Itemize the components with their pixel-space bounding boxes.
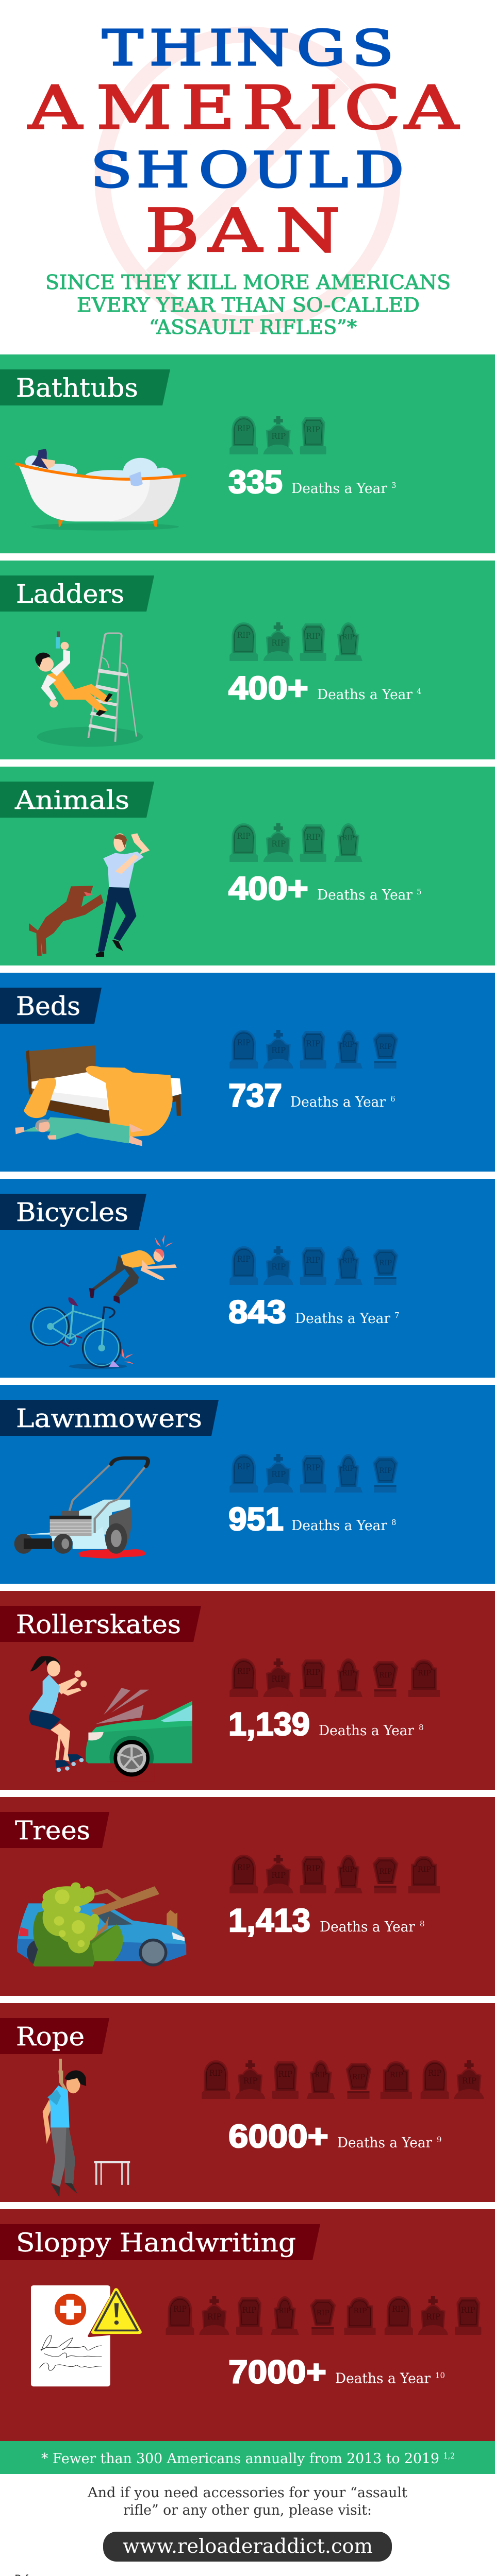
heading: animals: Animals	[14, 785, 129, 815]
heading: bicycles: Bicycles	[16, 1197, 128, 1227]
icon row: 6 gravestones	[229, 1658, 440, 1697]
stat: 1,139 deaths: Deaths a Year	[319, 1723, 414, 1739]
stat: 737 deaths: 6	[390, 1094, 395, 1104]
stat: 7000+ deaths	[228, 2354, 445, 2391]
icon row: 8 gravestones: RIP	[428, 2068, 441, 2078]
title line: BAN: BAN	[145, 196, 340, 265]
stat: 335 deaths: 3	[391, 481, 397, 490]
illustration: tree fallen on car	[17, 1883, 186, 1967]
stat: 1,139 deaths: 8	[419, 1723, 424, 1732]
icon row: 6 gravestones: RIP	[306, 1863, 320, 1873]
icon row: 5 gravestones	[229, 1454, 399, 1493]
icon row: 8 gravestones	[202, 2060, 484, 2099]
subtitle: SINCE THEY KILL MORE AMERICANS	[45, 271, 451, 294]
icon row: 6 gravestones: RIP	[306, 1667, 320, 1677]
stat: 6000+ deaths: 9	[437, 2135, 442, 2144]
illustration: prescription with warning sign	[31, 2285, 142, 2386]
subtitle: EVERY YEAR THAN SO-CALLED	[77, 294, 420, 316]
icon row: 9 gravestones	[166, 2296, 481, 2335]
icon row: 8 gravestones: RIP	[278, 2069, 293, 2079]
stat: 400+ deaths	[228, 871, 422, 907]
icon row: 9 gravestones: RIP	[207, 2312, 222, 2321]
icon row: 5 gravestones: RIP	[306, 1255, 320, 1265]
icon row: 9 gravestones: RIP	[279, 2307, 291, 2315]
illustration: man falling from ladder	[35, 632, 143, 747]
stat: 400+ deaths	[228, 670, 422, 706]
heading: lawnmowers: Lawnmowers	[16, 1403, 202, 1433]
icon row: 5 gravestones: RIP	[342, 1041, 354, 1049]
heading: rollerskates	[0, 1606, 201, 1642]
call to action text: And if you need accessories for your “assault	[87, 2485, 407, 2501]
icon row: 6 gravestones: RIP	[379, 1868, 392, 1876]
icon row: 4 gravestones: RIP	[237, 630, 251, 640]
heading: lawnmowers	[0, 1400, 219, 1436]
icon row: 9 gravestones: RIP	[392, 2304, 406, 2314]
icon row: 6 gravestones: RIP	[237, 1862, 251, 1872]
icon row: 8 gravestones: RIP	[315, 2071, 327, 2079]
icon row: 5 gravestones: RIP	[237, 1038, 251, 1047]
heading: animals	[0, 782, 154, 818]
icon row: 5 gravestones: RIP	[342, 1465, 354, 1473]
illustration: person in bathtub	[16, 449, 185, 531]
illustration: dog attacking man	[29, 833, 150, 957]
icon row: 5 gravestones: RIP	[306, 1463, 320, 1472]
ban symbol watermark	[103, 35, 392, 324]
stat: 843 deaths: 7	[394, 1311, 400, 1320]
stat: 7000+ deaths: 7000+	[228, 2354, 326, 2391]
stat: 6000+ deaths	[228, 2119, 442, 2155]
icon row: 8 gravestones: RIP	[243, 2076, 258, 2086]
title line: AMERICA: AMERICA	[28, 73, 459, 142]
icon row: 4 gravestones	[229, 622, 362, 661]
illustration: person fallen from bed	[15, 1045, 182, 1146]
stat: 335 deaths: 335	[228, 464, 283, 500]
panel: trees	[0, 1797, 495, 1996]
stat: 843 deaths: Deaths a Year	[295, 1311, 390, 1327]
icon row: 9 gravestones: RIP	[173, 2304, 187, 2314]
stat: 400+ deaths: 4	[417, 687, 422, 696]
stat: 400+ deaths: 400+	[228, 670, 308, 706]
panel: bathtubs	[0, 354, 495, 553]
illustration: cyclist thrown from bike	[31, 1235, 177, 1369]
stat: 400+ deaths: 400+	[228, 871, 308, 907]
stat: 1,413 deaths: 1,413	[228, 1903, 310, 1939]
stat: 1,413 deaths: Deaths a Year	[320, 1919, 415, 1935]
call to action text: rifle” or any other gun, please visit:	[123, 2502, 372, 2518]
website pill	[103, 2532, 392, 2562]
subtitle: “ASSAULT RIFLES”*	[149, 316, 357, 338]
stat: 1,413 deaths: 8	[420, 1919, 425, 1928]
icon row: 3 gravestones	[229, 416, 326, 454]
stat: 951 deaths	[228, 1501, 397, 1537]
stat: 951 deaths: 8	[391, 1518, 397, 1527]
icon row: 5 gravestones: RIP	[271, 1469, 286, 1479]
website pill: www.reloaderaddict.com	[123, 2535, 373, 2557]
panel: beds	[0, 973, 495, 1172]
stat: 400+ deaths: 5	[417, 887, 422, 896]
icon row: 6 gravestones	[229, 1855, 440, 1893]
icon row: 5 gravestones: RIP	[379, 1043, 392, 1051]
icon row: 6 gravestones: RIP	[237, 1666, 251, 1676]
icon row: 8 gravestones: RIP	[462, 2076, 476, 2086]
icon row: 4 gravestones: RIP	[306, 631, 320, 641]
illustration: skater hit by car	[29, 1656, 192, 1781]
icon row: 6 gravestones: RIP	[342, 1669, 354, 1677]
footnote banner: * Fewer than 300 Americans annually from 2013 to 2019	[41, 2451, 439, 2467]
panel: rollerskates	[0, 1591, 495, 1790]
icon row: 8 gravestones: RIP	[352, 2073, 365, 2081]
icon row: 5 gravestones: RIP	[342, 1257, 354, 1265]
icon row: 4 gravestones: RIP	[271, 638, 286, 648]
icon row: 9 gravestones: RIP	[317, 2309, 329, 2317]
icon row: 3 gravestones: RIP	[306, 425, 320, 434]
icon row: 5 gravestones	[229, 1246, 399, 1285]
icon row: 4 gravestones: RIP	[271, 839, 286, 849]
illustration: rope figure and table	[43, 2059, 130, 2197]
icon row: 5 gravestones: RIP	[271, 1262, 286, 1272]
icon row: 8 gravestones: RIP	[390, 2071, 403, 2079]
icon row: 9 gravestones: RIP	[242, 2305, 257, 2315]
icon row: 6 gravestones: RIP	[418, 1669, 431, 1677]
stat: 951 deaths: Deaths a Year	[291, 1518, 387, 1534]
heading: trees	[0, 1812, 109, 1848]
icon row: 9 gravestones: RIP	[354, 2307, 367, 2315]
icon row: 4 gravestones: RIP	[342, 633, 354, 641]
stat: 400+ deaths: Deaths a Year	[317, 887, 412, 903]
stat: 951 deaths: 951	[228, 1501, 284, 1537]
stat: 400+ deaths: Deaths a Year	[317, 687, 412, 703]
heading: ladders	[0, 575, 154, 612]
panel: animals	[0, 767, 495, 965]
icon row: 6 gravestones: RIP	[271, 1674, 286, 1684]
icon row: 5 gravestones: RIP	[237, 1462, 251, 1471]
stat: 737 deaths	[228, 1078, 395, 1114]
heading: beds: Beds	[16, 991, 80, 1021]
icon row: 9 gravestones: RIP	[426, 2312, 441, 2321]
stat: 335 deaths	[228, 464, 397, 500]
icon row: 5 gravestones: RIP	[237, 1254, 251, 1264]
icon row: 5 gravestones: RIP	[379, 1259, 392, 1267]
icon row: 4 gravestones: RIP	[306, 832, 320, 842]
heading: bathtubs: Bathtubs	[16, 373, 138, 403]
icon row: 5 gravestones: RIP	[379, 1467, 392, 1475]
heading: ladders: Ladders	[16, 579, 124, 609]
stat: 1,413 deaths	[228, 1903, 425, 1939]
stat: 843 deaths: 843	[228, 1294, 286, 1330]
stat: 737 deaths: 737	[228, 1078, 282, 1114]
icon row: 5 gravestones: RIP	[306, 1039, 320, 1048]
illustration: lawnmower with blood	[14, 1458, 148, 1558]
stat: 737 deaths: Deaths a Year	[290, 1094, 386, 1110]
title line: THINGS: THINGS	[102, 20, 394, 77]
stat: 1,139 deaths	[228, 1706, 424, 1742]
heading: bathtubs	[0, 369, 170, 405]
panel: ladders	[0, 561, 495, 759]
stat: 843 deaths	[228, 1294, 400, 1330]
heading: bicycles	[0, 1194, 146, 1230]
subtitle	[45, 271, 451, 338]
stat: 7000+ deaths: 10	[435, 2371, 445, 2380]
panel: rope	[0, 2003, 495, 2202]
heading: rope: Rope	[16, 2022, 85, 2052]
panel: lawnmowers	[0, 1385, 495, 1584]
heading: rollerskates: Rollerskates	[16, 1609, 181, 1639]
icon row: 9 gravestones: RIP	[461, 2305, 475, 2315]
icon row: 6 gravestones: RIP	[418, 1866, 431, 1874]
icon row: 3 gravestones: RIP	[271, 431, 286, 441]
stat: 335 deaths: Deaths a Year	[291, 481, 387, 497]
title line: SHOULD: SHOULD	[90, 142, 404, 198]
icon row: 6 gravestones: RIP	[342, 1866, 354, 1874]
stat: 6000+ deaths: Deaths a Year	[337, 2135, 432, 2151]
icon row: 8 gravestones: RIP	[209, 2068, 223, 2078]
footnote banner	[0, 2441, 495, 2474]
call to action text	[87, 2485, 407, 2518]
icon row: 6 gravestones: RIP	[271, 1870, 286, 1880]
icon row: 4 gravestones: RIP	[237, 831, 251, 841]
heading: sloppy handwriting	[0, 2224, 320, 2260]
heading: beds	[0, 988, 102, 1024]
panel: sloppy handwriting	[0, 2209, 495, 2441]
icon row: 4 gravestones: RIP	[342, 834, 354, 842]
heading: trees: Trees	[15, 1816, 90, 1845]
icon row: 5 gravestones	[229, 1030, 399, 1069]
icon row: 3 gravestones: RIP	[237, 423, 251, 433]
panel: bicycles	[0, 1179, 495, 1378]
heading: rope	[0, 2018, 109, 2054]
stat: 6000+ deaths: 6000+	[228, 2119, 328, 2155]
heading: sloppy handwriting: Sloppy Handwriting	[16, 2228, 296, 2258]
icon row: 6 gravestones: RIP	[379, 1671, 392, 1680]
footnote banner: 1,2	[443, 2451, 455, 2461]
header: title block	[28, 20, 459, 338]
icon row: 5 gravestones: RIP	[271, 1045, 286, 1055]
icon row: 4 gravestones	[229, 823, 362, 862]
stat: 1,139 deaths: 1,139	[228, 1706, 310, 1742]
stat: 7000+ deaths: Deaths a Year	[335, 2371, 431, 2386]
